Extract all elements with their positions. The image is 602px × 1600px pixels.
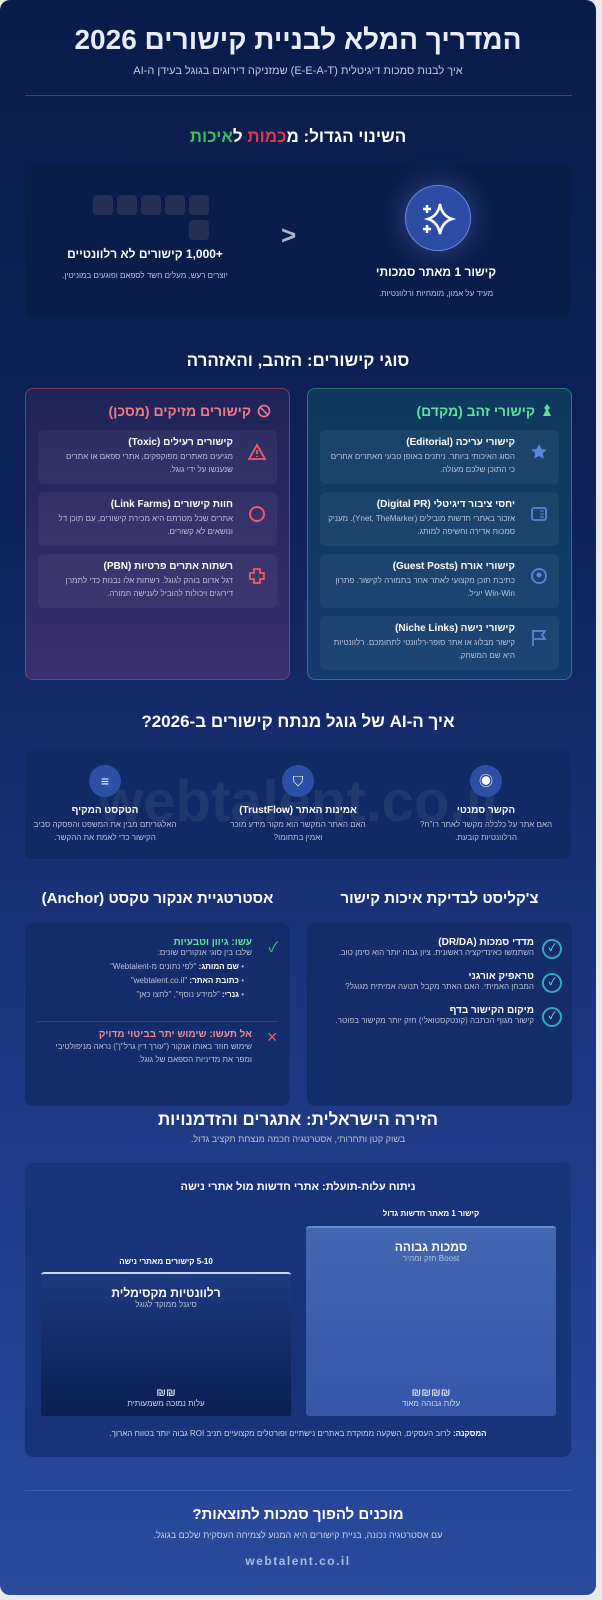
check item 2: טראפיק אורגני [468,971,534,982]
bar: niche sites: ₪₪ [156,1387,176,1399]
heading: anchor: אסטרטגיית אנקור טקסט (Anchor) [42,890,273,907]
item: semantic [420,765,552,842]
do: • גנרי: "למידע נוסף", "לחצו כאן" [136,990,244,999]
item: editorial [320,430,559,484]
check item 1: ✓ [549,943,555,954]
don't: אל תעשו: שימוש יתר בביטוי מדויק [99,1029,252,1040]
item: context: האלגוריתם מבין את המשפט והפסקה סביב הקישור כדי לאמת את ההקשר. [34,820,176,842]
check item 1: מדדי סמכות (DR/DA) [438,937,534,948]
heading: link types: סוגי קישורים: הזהב, והאזהרה [187,351,409,370]
check item 2 [345,971,562,993]
bar: news site [306,1209,556,1416]
item: semantic: ◉ [479,773,493,789]
heading: quantity to quality: השינוי הגדול: מכמות לאיכות [190,127,406,146]
heading: Israeli arena: הזירה הישראלית: אתגרים והזדמנויות [158,1110,438,1129]
item: PBN: דגל אדום בוהק לגוגל. רשתות אלו נבנות כדי לתמרן דירוגים ויכולות להוביל לענישה חמורה. [66,576,233,598]
don't: שימוש חוזר באותו אנקור ("עורך דין גרל"ן") נראה מניפולטיבי ומפר את מדיניות הספאם של גוגל. [56,1042,252,1064]
panel: checklist [307,923,572,1106]
item: link farms: חוות קישורים (Link Farms) [111,499,233,510]
greater than sign: < [281,220,296,250]
item: PBN: רשתות אתרים פרטיות (PBN) [104,561,233,572]
panel: harmful links [25,388,290,680]
item: niche links: קישור מבלוג או אתר סופר-רלוונטי לתחומכם. רלוונטיות היא שם המשחק. [334,638,515,660]
icon: sparkle [405,185,471,251]
bar: news site: סמכות גבוהה [395,1240,467,1254]
panel: AI analysis [25,750,571,859]
CTA heading: מוכנים להפוך סמכות לתוצאות? [192,1506,404,1523]
item: trustflow: אמינות האתר (TrustFlow) [239,805,357,816]
do: • כתובת האתר: "webtalent.co.il" [131,976,244,985]
bar: niche sites: עלות נמוכה משמעותית [127,1399,205,1408]
item: trustflow: ⛉ [293,773,303,789]
item: trustflow [230,765,366,842]
panel: cost-benefit [25,1163,571,1457]
watermark: webtalent.co.il [98,769,498,834]
item: editorial: הסוג האיכותי ביותר. ניתנים באופן טבעי מאתרים אחרים כי התוכן שלכם מעולה. [331,452,515,474]
panel: anchor [25,923,290,1106]
item: guest posts [320,554,559,608]
check item 1: השתמשו כאינדיקציה ראשונית. ציון גבוה יותר הוא סימן טוב. [339,948,534,957]
item: PBN [38,554,277,608]
check item 3 [336,1005,562,1027]
item: digital PR: יחסי ציבור דיגיטלי (Digital PR) [377,499,515,510]
item: link farms [38,492,277,546]
chart title: ניתוח עלות-תועלת: אתרי חדשות מול אתרי נישה [181,1181,415,1193]
do: שלבו בין סוגי אנקורים שונים: [158,948,252,957]
subtitle: איך לבנות סמכות דיגיטלית (E-E-A-T) שמזניקה דירוגים בגוגל בעידן ה-AI [133,65,463,77]
check item 3: קישור מגוף הכתבה (קונטקסטואלי) חזק יותר מקישור בפוטר. [336,1016,534,1025]
check item 1 [339,937,562,959]
check item 2: המבחן האמיתי. האם האתר מקבל תנועה אמיתית מגוגל? [345,982,534,991]
text: one authoritative link: קישור 1 מאתר סמכותי [376,265,496,279]
heading harmful: קישורים מזיקים (מסכן) [108,403,251,419]
panel: comparison: מעיד על אמון, מומחיות ורלוונטיות. [379,289,493,298]
item: guest posts: קישורי אורח (Guest Posts) [393,561,515,572]
bar: news site: קישור 1 מאתר חדשות גדול [383,1209,479,1218]
panel: comparison [25,165,571,317]
item: digital PR [320,492,559,546]
footer brand: webtalent.co.il [245,1554,351,1568]
item: link farms: אתרים שכל מטרתם היא מכירת קישורים, עם תוכן דל ונושאים לא קשורים. [59,514,233,536]
item: toxic [38,430,277,484]
item: editorial: קישורי עריכה (Editorial) [406,437,515,448]
item: semantic: הקשר סמנטי [457,805,515,816]
item: guest posts: כתיבת תוכן מקצועי לאתר אחר בתמורה לקישור. פתרון Win-Win יעיל. [335,576,515,598]
heading: checklist: צ'קליסט לבדיקת איכות קישור [341,890,538,907]
check item 3: ✓ [549,1011,555,1022]
bar: news site: עלות גבוהה מאוד [402,1399,460,1408]
check item 3: מיקום הקישור בדף [450,1005,534,1016]
CTA text: עם אסטרטגיה נכונה, בניית קישורים היא המנוע לצמיחה העסקית שלכם בגוגל. [154,1530,442,1540]
bar: news site: ₪₪₪₪ [412,1387,450,1399]
icon grid: weak links [93,195,209,240]
subtitle israeli: בשוק קטן ותחרותי, אסטרטגיה חכמה מנצחת תקציב גדול. [191,1134,405,1144]
item: context [34,765,176,842]
don't: ✕ [266,1029,278,1045]
panel: comparison: יוצרים רעש, מעלים חשד לספאם ופוגעים במוניטין. [62,271,228,280]
bar: news site: Boost חזק ומהיר [403,1254,459,1263]
item: niche links: קישורי נישה (Niche Links) [395,623,515,634]
item: trustflow: האם האתר המקשר הוא מקור מידע מוכר ואמין בתחומו? [230,820,366,842]
item: context: הטקסט המקיף [72,805,138,816]
title: המדריך המלא לבניית קישורים 2026 [74,24,522,55]
item: digital PR: אזכור באתרי חדשות מובילים (Ynet, TheMarker). מעניק סמכות אדירה וחשיפה למותג. [328,514,515,536]
do: • שם המותג: "לפי נתונים מ-Webtalent" [110,962,244,971]
item: semantic: האם אתר על כלכלה מקשר לאתר רו"ח? הרלוונטיות קובעת. [420,820,552,842]
do: עשו: גיוון וטבעיות [174,937,252,948]
bar: niche sites [41,1257,291,1416]
bar: niche sites: רלוונטיות מקסימלית [111,1286,221,1300]
heading gold: קישורי זהב (מקדם) [416,403,535,419]
conclusion: המסקנה: לרוב העסקים, השקעה ממוקדת באתרים נישתיים ופורטלים מקצועיים תניב ROI גבוה יותר בטווח הארוך. [109,1429,487,1438]
check item 2: ✓ [549,977,555,988]
item: toxic: קישורים רעילים (Toxic) [128,437,233,448]
bar: niche sites: 5-10 קישורים מאתרי נישה [119,1257,213,1266]
don't [56,1029,278,1064]
bar: niche sites: סיגנל ממוקד לגוגל [135,1300,197,1309]
do: ✓ [268,939,278,955]
panel: gold links [307,388,572,680]
text: 1000 irrelevant links: +1,000 קישורים לא רלוונטיים [67,247,223,261]
do [110,937,278,999]
item: niche links [320,616,559,670]
item: toxic: מגיעים מאתרים מפוקפקים, אתרי ספאם או אתרים שנענשו על ידי גוגל. [66,452,233,474]
heading: google AI: איך ה-AI של גוגל מנתח קישורים ב-2026? [141,712,455,731]
item: context: ≡ [101,773,109,789]
